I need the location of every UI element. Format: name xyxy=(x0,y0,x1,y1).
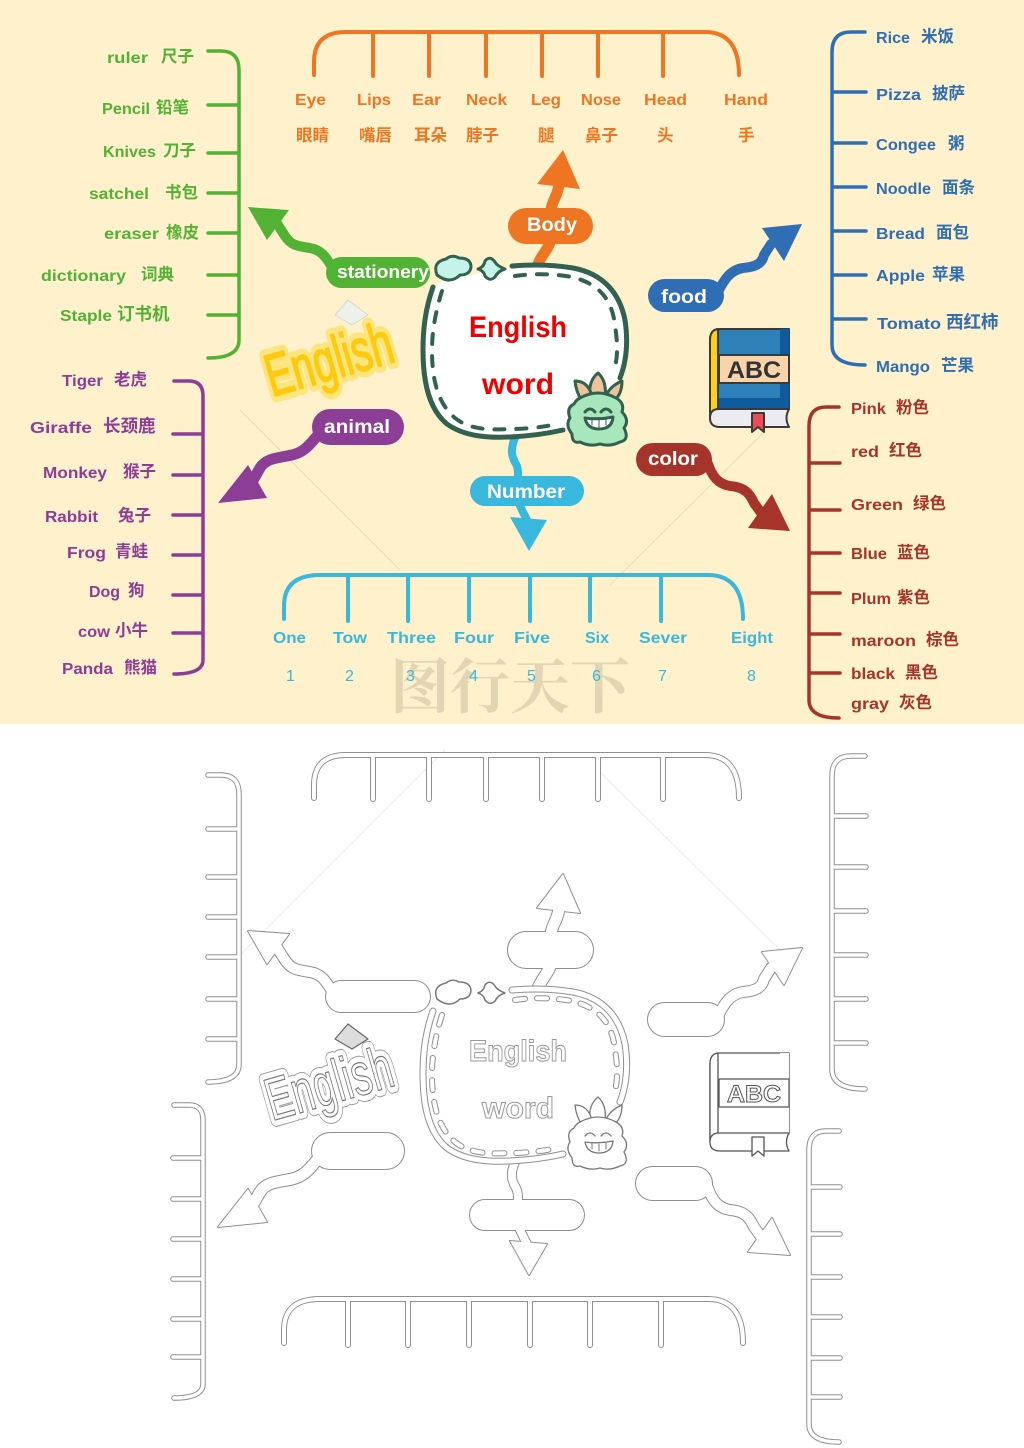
arrow: number xyxy=(470,436,584,551)
pill labels: animal xyxy=(324,417,390,438)
eye xyxy=(295,92,329,145)
congee xyxy=(876,134,964,154)
satchel xyxy=(89,182,198,203)
two: Tow xyxy=(333,630,368,647)
nose: 鼻子 xyxy=(585,125,618,145)
knives: Knives xyxy=(103,144,156,161)
neck xyxy=(466,92,507,145)
noodle: Noodle xyxy=(876,181,931,198)
pink: Pink xyxy=(851,401,886,418)
list: food words xyxy=(876,27,998,376)
pizza: Pizza xyxy=(876,87,921,104)
neck: Neck xyxy=(466,92,507,109)
congee: Congee xyxy=(876,137,936,154)
two: 2 xyxy=(345,668,354,685)
pill labels: color xyxy=(648,449,699,470)
lips xyxy=(357,92,392,145)
bracket: green stationery branch xyxy=(208,51,239,358)
ear xyxy=(412,92,448,145)
tiger xyxy=(62,370,147,390)
lips: 嘴唇 xyxy=(359,126,392,145)
five xyxy=(514,630,550,685)
giraffe xyxy=(30,416,156,437)
three xyxy=(387,630,436,685)
pizza xyxy=(876,84,965,104)
eraser xyxy=(104,222,199,243)
list: animal words xyxy=(30,370,157,678)
monkey: Monkey xyxy=(43,465,107,482)
staple: 订书机 xyxy=(117,304,170,324)
outline English sticker: English xyxy=(257,1033,401,1133)
bread: Bread xyxy=(876,226,925,243)
icon: ABC book xyxy=(710,329,789,432)
two xyxy=(333,630,368,685)
outline frame xyxy=(423,989,627,1161)
three: Three xyxy=(387,630,436,647)
monkey xyxy=(43,462,156,482)
frog: 青蛙 xyxy=(115,542,148,561)
gray: gray xyxy=(851,696,889,713)
eraser: eraser xyxy=(104,226,159,243)
bracket: orange body branch xyxy=(314,32,739,76)
ruler: ruler xyxy=(107,50,148,67)
dictionary: 词典 xyxy=(141,265,174,284)
mango xyxy=(876,356,974,376)
six xyxy=(585,630,609,685)
one: 1 xyxy=(286,668,295,685)
rabbit: 兔子 xyxy=(118,506,151,525)
maroon: 棕色 xyxy=(926,629,959,649)
panda: Panda xyxy=(62,661,113,678)
head xyxy=(644,92,687,145)
tomato: Tomato xyxy=(877,316,941,333)
bracket: purple animal branch xyxy=(173,381,203,674)
eye: 眼睛 xyxy=(296,126,329,145)
outline center title xyxy=(469,1035,567,1125)
red xyxy=(851,440,922,461)
three: 3 xyxy=(406,668,415,685)
ear: Ear xyxy=(412,92,441,109)
eraser: 橡皮 xyxy=(166,222,199,242)
green xyxy=(851,493,946,514)
apple xyxy=(876,265,966,285)
tomato: 西红柿 xyxy=(946,312,998,332)
leg xyxy=(531,92,561,145)
background: white outline area xyxy=(0,724,1024,1448)
giraffe: 长颈鹿 xyxy=(103,416,156,436)
pill labels: Number xyxy=(487,482,566,503)
bread: 面包 xyxy=(936,222,970,242)
black xyxy=(851,662,938,683)
center title xyxy=(469,311,567,401)
monkey: 猴子 xyxy=(123,462,156,481)
six: Six xyxy=(585,630,609,647)
list: body words xyxy=(295,92,768,145)
black: 黑色 xyxy=(905,662,938,682)
four xyxy=(454,630,494,685)
dog: 狗 xyxy=(128,581,144,600)
leg: 腿 xyxy=(538,127,555,145)
tiger: 老虎 xyxy=(114,370,147,389)
outline center title: word xyxy=(481,1092,554,1125)
English sticker: English xyxy=(257,309,401,409)
apple: 苹果 xyxy=(932,265,966,284)
arrow: stationery xyxy=(248,207,430,288)
pill labels: food xyxy=(661,287,707,308)
center title: word xyxy=(481,368,554,401)
leg: Leg xyxy=(531,92,561,109)
red: 红色 xyxy=(889,440,922,460)
frog: Frog xyxy=(67,545,106,562)
eight xyxy=(731,630,774,685)
central frame xyxy=(423,265,627,437)
seven xyxy=(639,630,687,685)
plum: 紫色 xyxy=(897,587,930,607)
one xyxy=(273,630,306,685)
pill labels: stationery xyxy=(337,262,429,282)
outline monster xyxy=(568,1097,627,1169)
list: color words xyxy=(851,397,959,713)
eight: Eight xyxy=(731,630,774,647)
icon: green monster xyxy=(568,373,627,445)
blue xyxy=(851,542,930,563)
noodle xyxy=(876,177,976,198)
hand: 手 xyxy=(738,125,754,145)
arrow: food xyxy=(648,224,802,312)
blue: 蓝色 xyxy=(897,542,930,562)
staple xyxy=(60,304,170,325)
ear: 耳朵 xyxy=(414,127,448,145)
outline brackets xyxy=(173,755,866,1442)
satchel: 书包 xyxy=(165,182,198,202)
four: Four xyxy=(454,630,494,647)
tiger: Tiger xyxy=(62,373,103,390)
frog xyxy=(67,542,148,562)
outline English sticker: English xyxy=(257,1033,401,1133)
knives: 刀子 xyxy=(163,141,196,160)
gray xyxy=(851,692,932,713)
six: 6 xyxy=(592,668,601,685)
five: Five xyxy=(514,630,550,647)
rabbit: Rabbit xyxy=(45,509,99,526)
seven: 7 xyxy=(658,668,667,685)
list: stationery words xyxy=(41,47,199,325)
outline English sticker xyxy=(257,1024,401,1133)
bracket: red color branch xyxy=(809,407,840,718)
arrow: body xyxy=(508,150,593,264)
black: black xyxy=(851,666,895,683)
rice: Rice xyxy=(876,30,910,47)
hand: Hand xyxy=(724,92,768,109)
red: red xyxy=(851,444,879,461)
apple: Apple xyxy=(876,268,925,285)
head: Head xyxy=(644,92,687,109)
bracket: cyan number branch xyxy=(284,575,743,621)
nose: Nose xyxy=(581,92,621,109)
watermark: 图行天下 xyxy=(390,640,631,726)
lips: Lips xyxy=(357,92,391,109)
outline ABC book: ABC xyxy=(727,1081,781,1108)
plum xyxy=(851,587,930,608)
green: Green xyxy=(851,497,903,514)
dog xyxy=(89,581,144,601)
four: 4 xyxy=(469,668,478,685)
gray: 灰色 xyxy=(899,692,932,712)
noodle: 面条 xyxy=(942,177,976,197)
outline center title: English xyxy=(469,1035,567,1068)
rice xyxy=(876,27,954,47)
pill labels xyxy=(324,215,707,503)
knives xyxy=(103,141,196,161)
seven: Sever xyxy=(639,630,687,647)
cow: 小牛 xyxy=(115,621,148,640)
pink xyxy=(851,397,929,418)
bread xyxy=(876,222,970,243)
mango: Mango xyxy=(876,359,930,376)
dictionary: dictionary xyxy=(41,268,126,285)
outline ABC book xyxy=(710,1053,789,1156)
blue: Blue xyxy=(851,546,887,563)
pencil: Pencil xyxy=(102,101,150,118)
pizza: 披萨 xyxy=(932,84,965,103)
congee: 粥 xyxy=(948,134,964,153)
English sticker: English xyxy=(257,309,401,409)
panda: 熊猫 xyxy=(124,657,157,677)
nose xyxy=(581,92,621,145)
outline clouds xyxy=(436,980,505,1004)
tomato xyxy=(877,312,998,333)
rice: 米饭 xyxy=(921,27,954,46)
center title: English xyxy=(469,311,567,344)
giraffe: Giraffe xyxy=(30,420,92,437)
five: 5 xyxy=(527,668,536,685)
maroon: maroon xyxy=(851,633,916,650)
cow: cow xyxy=(78,624,111,641)
clouds on frame xyxy=(436,256,505,280)
plum: Plum xyxy=(851,591,891,608)
eye: Eye xyxy=(295,92,326,109)
arrow: animal xyxy=(218,409,404,503)
icon: ABC book: ABC xyxy=(727,357,781,384)
ruler: 尺子 xyxy=(161,47,194,66)
outline English sticker: English xyxy=(257,1033,401,1133)
satchel: satchel xyxy=(89,186,149,203)
English sticker xyxy=(257,300,401,409)
hand xyxy=(724,92,768,145)
pencil xyxy=(102,97,189,118)
rabbit xyxy=(45,506,151,526)
dog: Dog xyxy=(89,584,120,601)
panda xyxy=(62,657,157,678)
neck: 脖子 xyxy=(466,126,499,145)
eight: 8 xyxy=(747,668,756,685)
pill labels: Body xyxy=(527,215,577,236)
cow xyxy=(78,621,148,641)
list: number words xyxy=(273,630,774,685)
head: 头 xyxy=(657,126,674,145)
green: 绿色 xyxy=(913,493,946,513)
one: One xyxy=(273,630,306,647)
pencil: 铅笔 xyxy=(156,97,189,117)
outline arrows and pills xyxy=(218,874,802,1275)
bracket: blue food branch xyxy=(832,32,866,365)
background: colored mind map area xyxy=(0,0,1024,724)
dictionary xyxy=(41,265,174,285)
outline version: line-art copy of the mind map xyxy=(173,755,866,1442)
mango: 芒果 xyxy=(941,356,974,375)
maroon xyxy=(851,629,959,650)
arrow: color xyxy=(636,443,790,531)
staple: Staple xyxy=(60,308,112,325)
pink: 粉色 xyxy=(896,397,929,417)
ruler xyxy=(107,47,194,67)
